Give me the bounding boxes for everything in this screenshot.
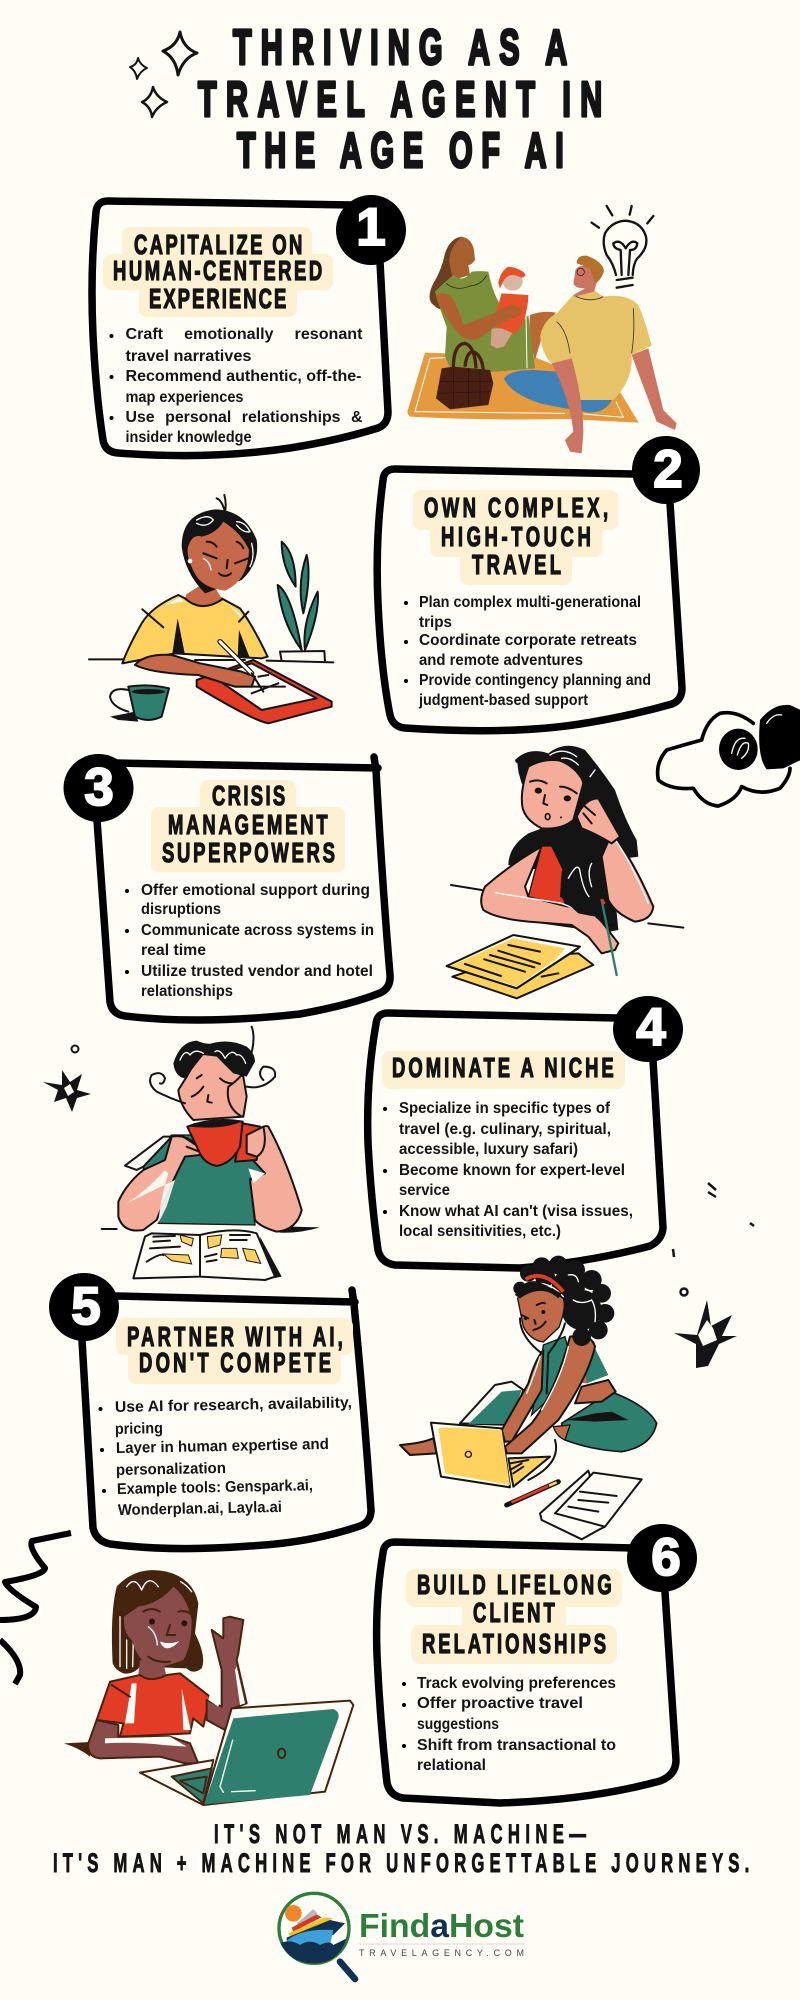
bullet list 1 — [110, 326, 362, 446]
bullet list 3: Offer emotional support during — [141, 882, 370, 899]
bullet list 1: Recommend authentic, off-the- — [126, 368, 362, 385]
footer tagline — [53, 1819, 749, 1878]
bullet list 5: Use AI for research, availability, — [115, 1394, 352, 1416]
bullet list 6: Track evolving preferences — [417, 1675, 616, 1692]
bullet list 5: Layer in human expertise and — [116, 1436, 329, 1457]
title: THE AGE OF AI — [237, 123, 564, 178]
heading 1 — [103, 227, 333, 317]
bullet list 1: Craft emotionally resonant — [126, 326, 362, 343]
number badge 5: 5 — [71, 1277, 101, 1336]
bullet list 4: service — [399, 1182, 450, 1199]
panel: card 4 — [368, 996, 683, 1268]
number badge 2: 2 — [653, 440, 683, 499]
icon: stars and marks left of coffee — [43, 1046, 91, 1112]
logo: FindaHost Travel Agency — [279, 1893, 524, 1979]
bullet list 5 — [98, 1394, 352, 1519]
panel: card 3 — [64, 754, 390, 1020]
heading 6: CLIENT — [473, 1598, 555, 1629]
bullet list 5: personalization — [116, 1460, 226, 1479]
bullet list 6 — [402, 1675, 616, 1774]
bullet list 3: real time — [141, 942, 206, 959]
number badge 6 — [627, 1524, 697, 1592]
heading 1: CAPITALIZE ON — [134, 230, 302, 261]
heading 1: HUMAN-CENTERED — [113, 256, 322, 287]
footer tagline: IT'S NOT MAN VS. MACHINE— — [214, 1819, 586, 1849]
bullet list 5: Wonderplan.ai, Layla.ai — [118, 1499, 282, 1519]
bullet list 3 — [125, 882, 374, 1000]
bullet list 3: disruptions — [141, 901, 221, 918]
illustration: man sipping coffee with book — [102, 1027, 320, 1280]
heading 3: MANAGEMENT — [168, 810, 328, 841]
icon: light bulb — [592, 206, 653, 288]
illustration: family picnic with light bulb — [407, 206, 677, 453]
illustration: woman with laptop on the floor — [400, 1256, 657, 1539]
bullet list 1: Use personal relationships & — [126, 409, 362, 426]
bullet list 4: Become known for expert-level — [399, 1162, 625, 1179]
bullet list 3: relationships — [141, 983, 233, 1000]
bullet list 1: map experiences — [126, 389, 244, 406]
bullet list 4: Specialize in specific types of — [399, 1100, 611, 1117]
title: THRIVING AS A — [233, 20, 567, 75]
bullet list 4: Know what AI can't (visa issues, — [399, 1203, 633, 1220]
bullet list 4: local sensitivities, etc.) — [399, 1223, 561, 1240]
icon: magnifier with ship — [279, 1893, 355, 1979]
number badge 4 — [613, 996, 683, 1062]
heading 6: BUILD LIFELONG — [417, 1570, 612, 1601]
number badge 3 — [64, 754, 134, 822]
bullet list 2: Plan complex multi-generational — [419, 594, 641, 611]
heading 1: EXPERIENCE — [149, 284, 286, 315]
heading 4: DOMINATE A NICHE — [392, 1053, 614, 1084]
heading 2: OWN COMPLEX, — [424, 493, 608, 524]
panel: card 6 — [377, 1524, 697, 1803]
bullet list 2: Coordinate corporate retreats — [419, 632, 637, 649]
title — [198, 20, 602, 178]
bullet list 1: insider knowledge — [126, 429, 252, 446]
number badge 4: 4 — [636, 998, 666, 1057]
heading 2: TRAVEL — [472, 550, 561, 581]
wordmark: TRAVELAGENCY.COM — [359, 1948, 524, 1958]
illustration: woman on phone with papers — [447, 746, 683, 998]
panel: card 5 — [49, 1273, 371, 1549]
icon: sparkles — [130, 32, 197, 117]
footer tagline: IT'S MAN + MACHINE FOR UNFORGETTABLE JOURNEYS. — [53, 1848, 749, 1878]
bullet list 2: trips — [419, 614, 452, 631]
bullet list 6: Shift from transactional to — [417, 1737, 616, 1754]
number badge 1 — [336, 195, 406, 265]
icon: scribble line — [0, 1533, 71, 1684]
heading 5: PARTNER WITH AI, — [127, 1322, 343, 1353]
icon: stars and marks right of laptop — [673, 1183, 754, 1368]
bullet list 6: relational — [417, 1757, 486, 1774]
heading 5 — [116, 1318, 353, 1384]
heading 3 — [151, 780, 345, 872]
bullet list 6: Offer proactive travel — [417, 1695, 583, 1712]
bullet list 3: Communicate across systems in — [141, 922, 374, 939]
bullet list 2 — [404, 594, 651, 709]
bullet list 1: travel narratives — [126, 348, 252, 365]
number badge 5 — [49, 1273, 119, 1341]
panel: card 2 — [377, 436, 700, 731]
heading 6 — [406, 1569, 622, 1664]
heading 2: HIGH-TOUCH — [441, 522, 591, 553]
bullet list 3: Utilize trusted vendor and hotel — [141, 963, 373, 980]
bullet list 2: and remote adventures — [419, 652, 583, 669]
bullet list 5: Example tools: Genspark.ai, — [117, 1477, 313, 1498]
bullet list 4: accessible, luxury safari) — [399, 1141, 578, 1158]
bullet list 6: suggestions — [417, 1716, 499, 1733]
heading 3: SUPERPOWERS — [162, 838, 335, 869]
heading 2 — [413, 490, 618, 585]
bullet list 5: pricing — [115, 1420, 163, 1438]
number badge 2 — [632, 436, 700, 504]
bullet list 4 — [383, 1100, 633, 1240]
bullet list 2: Provide contingency planning and — [419, 672, 651, 689]
panel: card 1 — [92, 195, 406, 456]
heading 6: RELATIONSHIPS — [422, 1629, 606, 1660]
number badge 6: 6 — [651, 1528, 681, 1587]
bullet list 4: travel (e.g. culinary, spiritual, — [399, 1121, 611, 1138]
illustration: scribble cloud — [658, 705, 800, 806]
heading 3: CRISIS — [212, 781, 285, 812]
illustration: woman writing on tablet — [89, 495, 333, 723]
heading 5: DON'T COMPETE — [139, 1348, 331, 1379]
bullet list 2: judgment-based support — [418, 692, 588, 709]
number badge 1: 1 — [356, 198, 386, 257]
title: TRAVEL AGENT IN — [198, 72, 602, 127]
illustration: girl waving at laptop — [64, 1570, 353, 1805]
wordmark: FindaHost — [359, 1907, 524, 1944]
number badge 3: 3 — [84, 758, 114, 817]
